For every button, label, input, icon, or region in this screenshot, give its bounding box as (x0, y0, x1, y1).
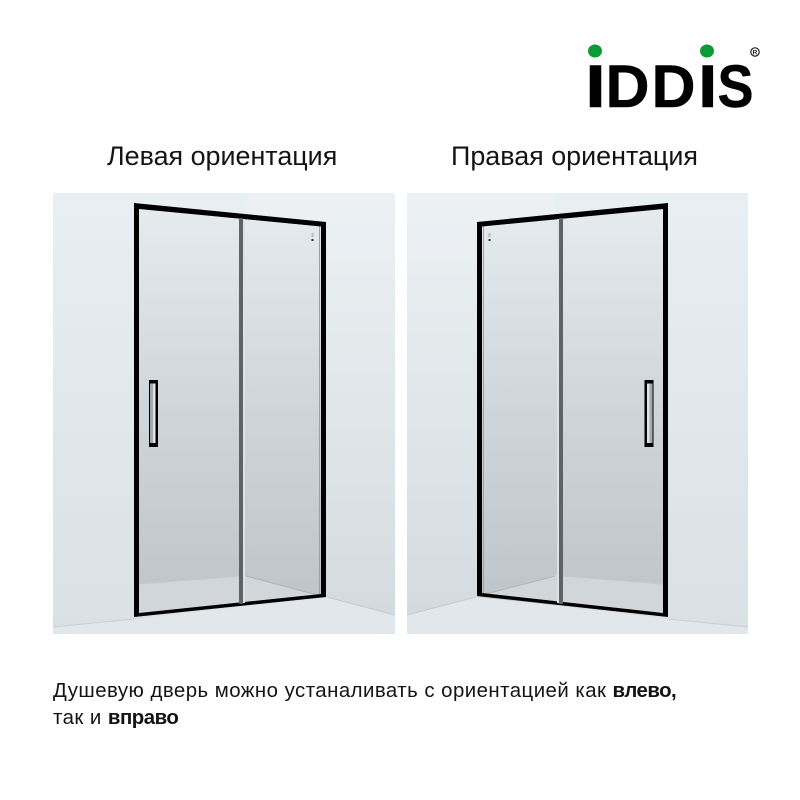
text block: description: Душевую дверь можно устаналивать с ориентацией как влево, (53, 680, 676, 702)
center rail (239, 218, 245, 604)
logo: IDDIS: S (718, 53, 754, 120)
glass (477, 204, 668, 617)
center rail (557, 218, 563, 604)
text block: description: так и вправо (53, 707, 178, 729)
logo: IDDIS: I (698, 53, 718, 120)
heading: right orientation: Правая ориентация (451, 141, 698, 171)
heading: left orientation: Левая ориентация (107, 141, 337, 171)
panel: left orientation door (53, 193, 395, 634)
logo: IDDIS: D (652, 53, 696, 120)
icon: handle (149, 380, 158, 447)
logo: IDDIS (585, 44, 760, 120)
icon: handle (644, 380, 654, 447)
text block: description (53, 680, 676, 729)
icon: door frame (134, 203, 326, 617)
logo: IDDIS: R (753, 50, 758, 56)
icon: door frame (477, 203, 668, 617)
glass (134, 204, 326, 617)
panel: right orientation door (407, 193, 748, 634)
logo: IDDIS: I (585, 53, 606, 120)
logo: IDDIS: D (606, 53, 650, 120)
